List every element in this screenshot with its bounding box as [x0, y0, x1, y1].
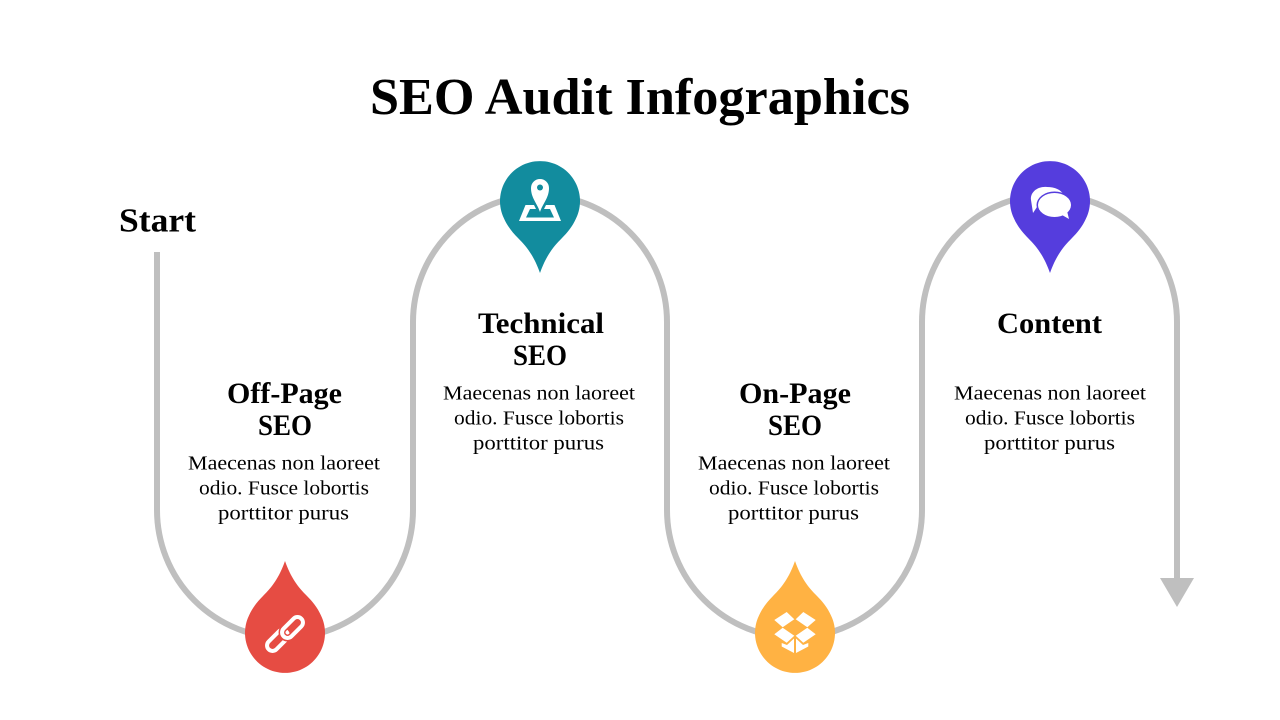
text block: technical SEO: SEO	[513, 339, 567, 372]
text block: off-page SEO: porttitor purus	[218, 502, 349, 524]
text block: content	[954, 307, 1146, 454]
text block: off-page SEO: Maecenas non laoreet	[188, 452, 380, 474]
title: SEO Audit Infographics	[370, 69, 910, 126]
text block: technical SEO: Maecenas non laoreet	[443, 382, 635, 404]
text block: content: Content	[997, 307, 1102, 340]
text block: content: porttitor purus	[984, 432, 1115, 454]
text block: on-page SEO: porttitor purus	[728, 502, 859, 524]
text block: content: odio. Fusce lobortis	[965, 408, 1135, 430]
winding path arrow	[157, 195, 1194, 638]
text block: technical SEO: Technical	[478, 307, 604, 340]
text block: off-page SEO: SEO	[258, 409, 312, 442]
pin: on-page SEO box icon	[755, 561, 835, 673]
start label: Start	[119, 202, 197, 240]
text block: on-page SEO: On-Page	[739, 377, 851, 410]
pin: technical SEO map icon	[500, 161, 580, 273]
text block: on-page SEO: odio. Fusce lobortis	[709, 478, 879, 500]
icon: chain link	[265, 615, 305, 653]
text block: on-page SEO	[698, 377, 890, 524]
text block: technical SEO: odio. Fusce lobortis	[454, 408, 624, 430]
text block: on-page SEO: Maecenas non laoreet	[698, 452, 890, 474]
text block: off-page SEO	[188, 377, 380, 524]
pin: content chat icon	[1010, 161, 1090, 273]
text block: off-page SEO: Off-Page	[227, 377, 342, 410]
pin: off-page SEO link icon	[245, 561, 325, 673]
text block: on-page SEO: SEO	[768, 409, 822, 442]
text block: off-page SEO: odio. Fusce lobortis	[199, 478, 369, 500]
text block: technical SEO	[443, 307, 635, 454]
icon: chat bubbles	[1031, 187, 1072, 219]
icon: open box	[774, 612, 816, 653]
text block: content: Maecenas non laoreet	[954, 382, 1146, 404]
icon: map with marker	[519, 179, 561, 221]
text block: technical SEO: porttitor purus	[473, 432, 604, 454]
